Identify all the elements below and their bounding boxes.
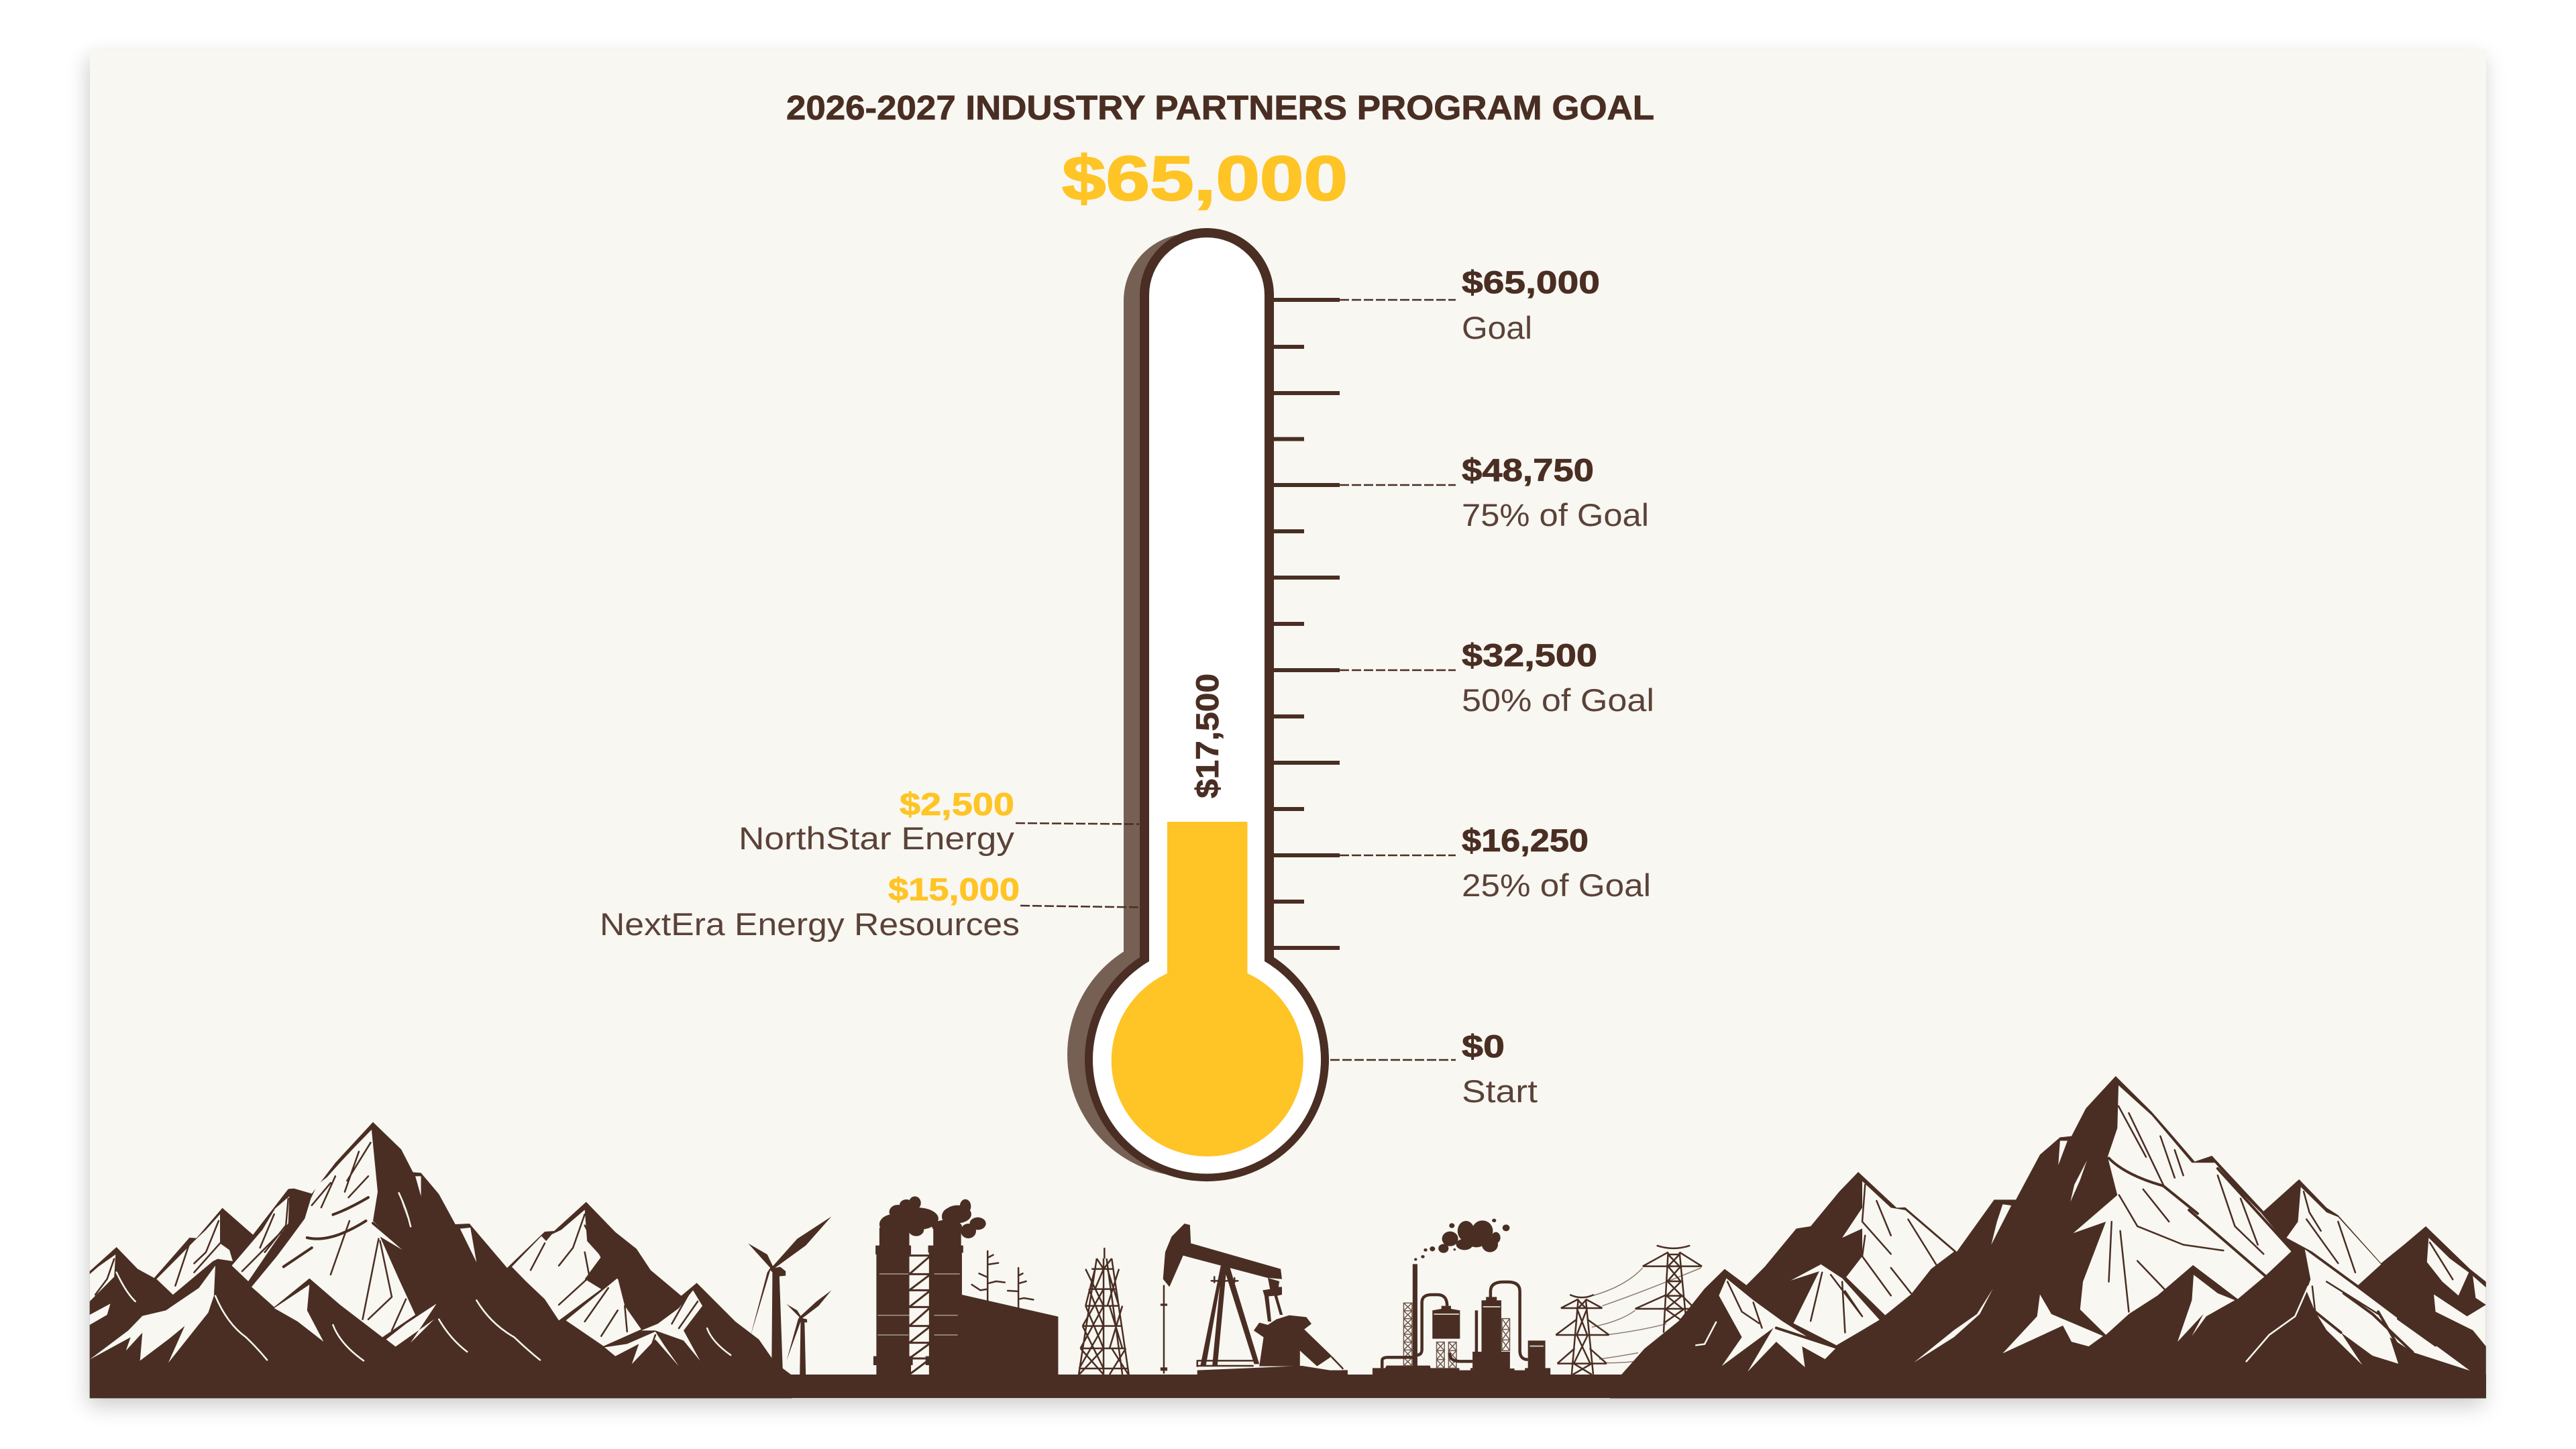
right mountains — [1610, 1076, 2486, 1399]
milestone: start — [1462, 1028, 1538, 1109]
milestone: goal: Goal — [1462, 310, 1532, 345]
milestone: start: $0 — [1462, 1028, 1505, 1064]
left mountains — [90, 1122, 792, 1398]
smoke cloud — [1414, 1219, 1509, 1260]
refinery and power pylons — [1342, 1219, 1702, 1375]
storage tank — [1432, 1306, 1460, 1339]
donor: NorthStar Energy: NorthStar Energy — [739, 820, 1015, 856]
lattice columns — [1403, 1303, 1509, 1368]
gold fill level — [1112, 822, 1303, 1157]
title: 2026-2027 INDUSTRY PARTNERS PROGRAM GOAL — [786, 89, 1654, 127]
stack highlights — [877, 1274, 960, 1335]
thermometer shadow — [1067, 233, 1311, 1177]
wind turbines, smokestacks and pumpjack — [748, 1196, 1347, 1375]
current total rotated label: $17,500 — [1189, 674, 1225, 798]
milestone: 50 percent — [1462, 637, 1654, 718]
donor: NextEra Energy Resources: $15,000 — [888, 871, 1020, 907]
power lines — [1592, 1268, 1701, 1363]
tank highlights — [1434, 1307, 1544, 1346]
milestone: 25 percent: $16,250 — [1462, 822, 1589, 858]
oil derrick — [1079, 1248, 1129, 1375]
wind turbine small — [786, 1290, 831, 1375]
milestone: 50 percent: 50% of Goal — [1462, 682, 1654, 718]
wind turbine large — [748, 1216, 831, 1375]
milestone: 50 percent: $32,500 — [1462, 637, 1597, 673]
thermometer glass — [1093, 237, 1321, 1174]
stack scaffold — [910, 1256, 930, 1375]
pine trees — [972, 1251, 1033, 1308]
milestone: 25 percent: 25% of Goal — [1462, 867, 1651, 903]
refinery silhouette — [1342, 1264, 1550, 1375]
milestone: 75 percent: 75% of Goal — [1462, 497, 1649, 533]
donor: NextEra Energy Resources: NextEra Energy Resources — [600, 906, 1020, 942]
milestone: 75 percent: $48,750 — [1462, 452, 1594, 488]
donor: NextEra Energy Resources — [600, 871, 1020, 942]
ground strip — [90, 1375, 2486, 1398]
scale ticks — [1273, 300, 1340, 948]
goal amount heading: $65,000 — [1062, 143, 1348, 213]
milestone: 25 percent — [1462, 822, 1651, 903]
thermometer outline — [1085, 228, 1329, 1181]
thermometer — [1067, 228, 1340, 1181]
smokestacks — [873, 1228, 1058, 1375]
milestone: 75 percent — [1462, 452, 1649, 533]
right milestone labels — [1330, 264, 1654, 1109]
milestone: goal: $65,000 — [1462, 264, 1600, 300]
milestone: start: Start — [1462, 1073, 1538, 1109]
pylon small — [1556, 1295, 1609, 1375]
donor: NorthStar Energy — [739, 786, 1015, 856]
smoke plume — [879, 1196, 986, 1238]
pylon large — [1635, 1246, 1702, 1333]
milestone: goal — [1462, 264, 1600, 345]
process pipes — [1382, 1282, 1528, 1368]
left donor labels — [600, 786, 1139, 942]
pumpjack — [1161, 1224, 1347, 1375]
donor: NorthStar Energy: $2,500 — [900, 786, 1014, 822]
